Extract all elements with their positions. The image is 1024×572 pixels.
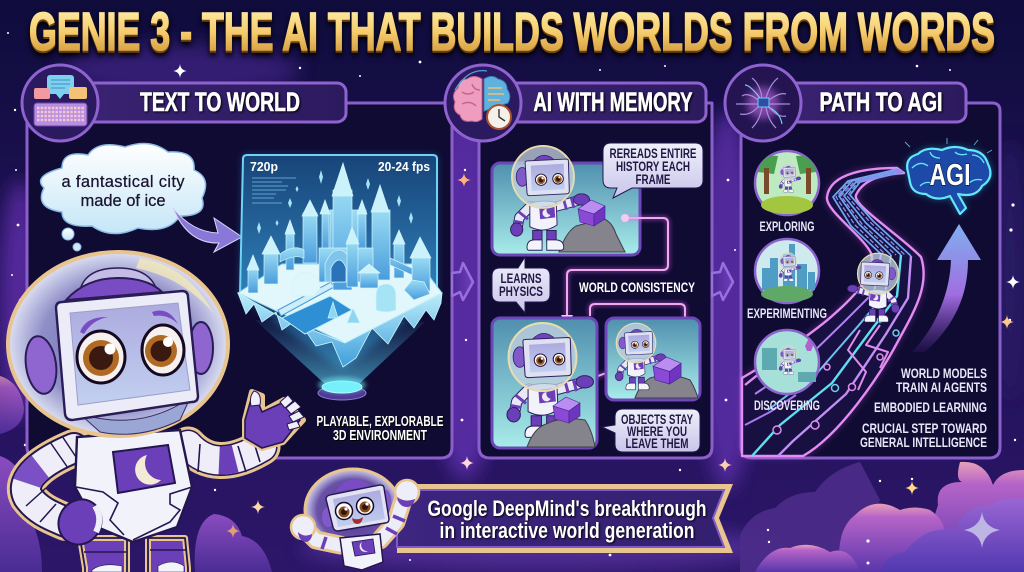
helmet <box>8 252 228 436</box>
cheering eyes <box>336 498 374 520</box>
left ear <box>22 334 60 396</box>
banner: google deepmind <box>397 484 733 553</box>
rock <box>559 219 625 252</box>
icon: circuit chip <box>725 65 801 141</box>
astronaut <box>615 323 666 390</box>
right eye <box>142 325 184 375</box>
hair cap <box>66 268 162 300</box>
cheering body <box>340 534 383 570</box>
label: world consistency: WORLD CONSISTENCY <box>579 280 695 295</box>
callout: objects stay: OBJECTS STAY <box>621 412 693 427</box>
purple cube <box>578 200 605 226</box>
hologram: ice city <box>238 155 442 400</box>
header: path to agi <box>780 83 966 122</box>
left eye <box>77 331 125 383</box>
cheering ears <box>322 490 391 527</box>
header: text to world <box>80 83 346 122</box>
banner inner <box>397 490 724 547</box>
caption: playable environment: PLAYABLE, EXPLORABLE <box>316 414 444 430</box>
right arm <box>188 436 262 472</box>
arrow: text to world to memory <box>452 263 473 300</box>
header: ai with memory: AI WITH MEMORY <box>534 87 692 117</box>
text: world models benefits: TRAIN AI AGENTS <box>896 379 987 395</box>
callout: objects stay: LEAVE THEM <box>626 436 688 451</box>
resolution label: 720p <box>250 159 278 174</box>
scene: placing the cube <box>492 318 597 448</box>
panel: ai with memory <box>445 65 733 458</box>
rock <box>527 419 595 447</box>
icon: chat and keyboard <box>22 65 98 141</box>
projector beam <box>255 320 425 385</box>
cheering cap <box>335 479 370 492</box>
cloud text: a fantastical city <box>62 173 185 191</box>
cheering head <box>326 485 389 531</box>
agi label: AGI <box>930 157 970 192</box>
text: world models benefits: WORLD MODELS <box>901 365 987 381</box>
text: world models benefits <box>860 365 987 450</box>
icon: brain and clock <box>445 65 521 141</box>
agi brain <box>905 138 992 214</box>
callout: rereads history: REREADS ENTIRE <box>610 146 696 161</box>
header: ai with memory <box>500 83 706 122</box>
callout: learns physics: LEARNS <box>500 271 542 286</box>
head screen <box>56 291 198 420</box>
cheering mouth <box>352 517 363 524</box>
callout: objects stay <box>602 409 700 452</box>
callout: rereads history: FRAME <box>636 172 670 187</box>
astronaut <box>507 323 593 437</box>
arrow: memory to agi <box>712 263 733 300</box>
circle: exploring <box>755 151 819 215</box>
callout: learns physics: PHYSICS <box>499 284 543 299</box>
panel frame <box>741 103 1000 458</box>
banner text: in interactive world generation <box>440 518 694 543</box>
nebula clouds left <box>0 376 272 572</box>
connector lines: world consistency <box>561 214 690 386</box>
panel frame <box>479 103 712 458</box>
arrow: prompt to world <box>173 208 242 252</box>
arrow: up toward agi <box>912 224 981 352</box>
callout: rereads history <box>603 143 703 198</box>
label: discovering: DISCOVERING <box>754 398 820 413</box>
ice castle <box>247 163 431 323</box>
mascot: large astronaut <box>8 252 304 572</box>
legs <box>80 538 188 572</box>
header: path to agi: PATH TO AGI <box>820 87 942 117</box>
framerate label: 20-24 fps <box>378 159 430 174</box>
panel: text to world <box>22 65 473 458</box>
cheering helmet <box>305 469 401 551</box>
cheering arms <box>306 500 405 549</box>
helmet gold glare <box>136 258 214 314</box>
circle: discovering <box>755 330 819 394</box>
astronaut <box>511 146 590 250</box>
banner text: Google DeepMind's breakthrough <box>428 496 706 521</box>
purple cube <box>553 397 580 423</box>
face <box>70 303 190 405</box>
chest badge <box>113 445 175 493</box>
cheering fists <box>291 480 419 542</box>
right glove <box>245 391 304 448</box>
callout: objects stay: WHERE YOU <box>627 424 687 439</box>
brows <box>80 310 178 334</box>
hologram screen <box>240 155 437 294</box>
panel: path to agi <box>725 65 1000 458</box>
mascot: cheering astronaut <box>291 469 419 570</box>
brain outline <box>907 147 990 214</box>
panel frame <box>27 103 452 458</box>
label: experimenting: EXPERIMENTING <box>747 306 827 321</box>
torso <box>75 430 192 542</box>
callout: rereads history: HISTORY EACH <box>616 159 690 174</box>
header: text to world: TEXT TO WORLD <box>140 87 300 117</box>
callout: learns physics <box>492 257 550 313</box>
floating island <box>238 264 442 367</box>
thought cloud <box>41 143 206 251</box>
hologram glow <box>240 155 437 370</box>
rock <box>635 375 698 398</box>
scene: touching the cube <box>492 146 640 255</box>
left glove <box>50 492 110 552</box>
projector base <box>318 377 366 400</box>
text: world models benefits: EMBODIED LEARNING <box>874 399 987 415</box>
label: exploring: EXPLORING <box>760 219 814 234</box>
nebula clouds right <box>740 462 1024 572</box>
icon: gemini sparkle <box>964 512 1000 548</box>
left arm <box>26 436 78 522</box>
brain glow <box>907 147 990 214</box>
right ear <box>189 322 213 374</box>
cheering badge <box>352 539 375 556</box>
circle: experimenting <box>755 239 819 303</box>
cloud text: made of ice <box>80 192 166 210</box>
astronaut on road <box>847 253 899 322</box>
cheering face <box>333 490 385 527</box>
banner ribbon <box>397 484 733 553</box>
glowing road <box>742 168 924 456</box>
scene: cube stays <box>606 318 700 400</box>
cheering badge moon <box>360 542 368 552</box>
caption: playable environment: 3D ENVIRONMENT <box>333 428 427 444</box>
neck ring <box>80 398 190 434</box>
purple cube <box>653 357 681 384</box>
